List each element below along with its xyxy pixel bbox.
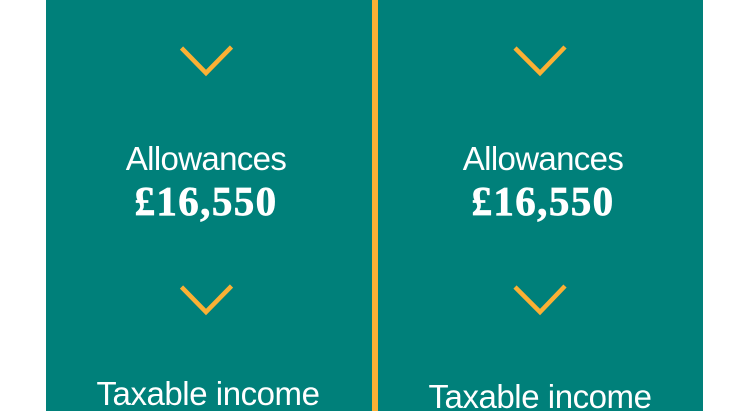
label: left allowances: Allowances [126,140,286,177]
value: right allowances: £16,550 [471,178,615,224]
label: right allowances: Allowances [463,140,623,177]
value: left allowances: £16,550 [134,178,278,224]
label: left taxable income: Taxable income [96,375,320,411]
divider: vertical amber line [372,0,378,411]
